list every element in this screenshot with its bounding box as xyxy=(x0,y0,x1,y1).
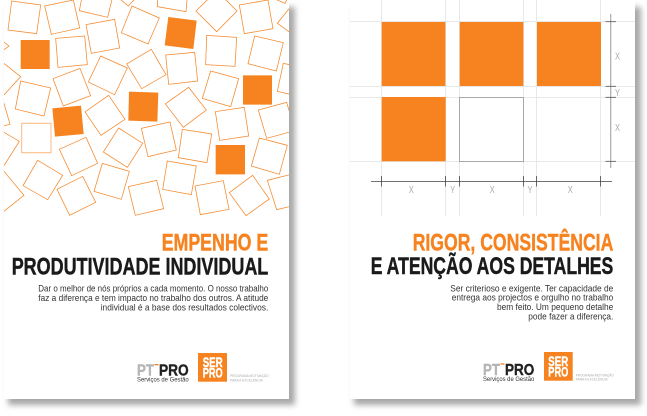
heading: empenho e produtividade xyxy=(12,230,268,280)
logo: SER PRO right: PRO xyxy=(548,363,568,379)
text: programa motivação: PARA A EXCELÊNCIA xyxy=(230,377,263,382)
horizontal ruler: X xyxy=(568,185,573,196)
text block: empenho description: faz a diferença e tem impacto no trabalho dos outros. A atitude xyxy=(38,293,268,304)
text: programa motivação right xyxy=(576,372,614,382)
horizontal ruler: X xyxy=(409,185,414,196)
horizontal ruler xyxy=(371,176,612,196)
text block: empenho description xyxy=(38,284,268,313)
panel: empenho card xyxy=(0,0,307,405)
logo: SER PRO: SER xyxy=(203,354,223,370)
heading: rigor, consistência xyxy=(371,229,613,280)
horizontal ruler: Y xyxy=(528,185,533,196)
text block: empenho description: Dar o melhor de nós próprios a cada momento. O nosso trabalho xyxy=(38,284,268,295)
horizontal ruler: X xyxy=(490,185,495,196)
text block: rigor description: pode fazer a diferença. xyxy=(528,311,613,322)
pattern: scattered orange squares xyxy=(0,0,307,216)
vertical ruler: X xyxy=(615,123,620,134)
text block: rigor description: bem feito. Um pequeno detalhe xyxy=(497,302,613,313)
grid: construction lines xyxy=(350,0,635,216)
horizontal ruler: Y xyxy=(450,185,455,196)
logo: PT PRO right: Serviços de Gestão xyxy=(483,376,535,383)
logo: PT PRO right: PT xyxy=(483,362,500,379)
text block: rigor description xyxy=(450,283,613,322)
logo: SER PRO xyxy=(198,353,227,382)
vertical ruler: Y xyxy=(615,88,620,99)
logo: PT PRO xyxy=(137,362,189,384)
orange squares xyxy=(382,22,601,161)
heading: empenho e produtividade: PRODUTIVIDADE INDIVIDUAL xyxy=(12,253,268,280)
logo: PT PRO: Serviços de Gestão xyxy=(137,376,189,384)
text: programa motivação: PROGRAMA MOTIVAÇÃO xyxy=(230,373,269,378)
text block: rigor description: Ser criterioso e exigente. Ter capacidade de xyxy=(450,283,613,294)
logo: PT PRO: PT xyxy=(137,362,154,380)
logo: PT PRO: PRO xyxy=(159,362,189,380)
text: programa motivação right: PROGRAMA MOTIVAÇÃO xyxy=(576,372,614,377)
logo: SER PRO: PRO xyxy=(203,364,223,380)
heading: empenho e produtividade: EMPENHO E xyxy=(162,230,268,257)
logo: PT PRO right xyxy=(483,362,535,383)
logo: PT PRO right: PRO xyxy=(505,362,534,379)
vertical ruler xyxy=(606,14,620,168)
text: programa motivação right: PARA A EXCELÊNCIA xyxy=(576,376,608,382)
text block: empenho description: individual é a base dos resultados colectivos. xyxy=(101,302,268,313)
text: programa motivação xyxy=(230,373,269,382)
vertical ruler: X xyxy=(615,52,620,62)
empty outlined square xyxy=(460,98,524,162)
text block: rigor description: entrega aos projectos e orgulho no trabalho xyxy=(452,293,613,304)
logo: SER PRO right xyxy=(544,352,573,381)
panel: rigor card xyxy=(350,0,641,405)
logo: SER PRO right: SER xyxy=(548,353,568,369)
